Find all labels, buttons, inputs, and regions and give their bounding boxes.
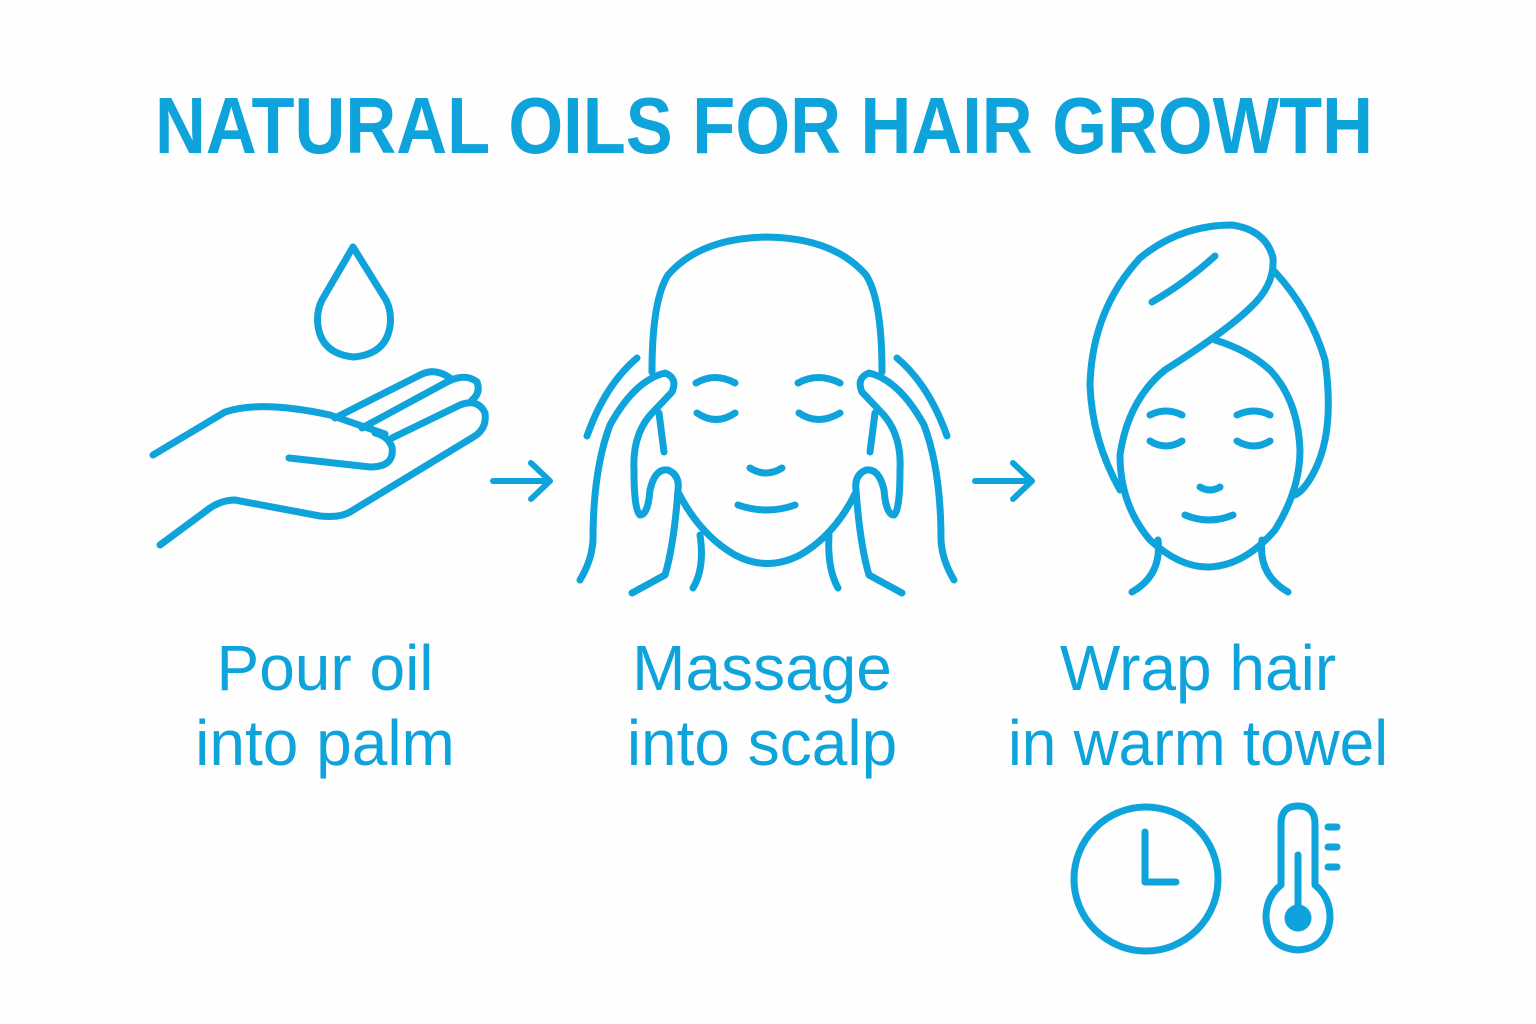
title: NATURAL OILS FOR HAIR GROWTH [155, 81, 1373, 170]
icon: face with towel [1090, 225, 1328, 592]
label: step 3: Wrap hair [1060, 632, 1336, 704]
label: step 2: into scalp [627, 707, 897, 779]
label: step 3: in warm towel [1008, 707, 1388, 779]
label: step 1: into palm [195, 707, 455, 779]
arrow 1 [493, 463, 550, 499]
arrow 2 [975, 463, 1032, 499]
icon: clock [1074, 807, 1218, 951]
label: step 2: Massage [632, 632, 892, 704]
label: step 1: Pour oil [216, 632, 434, 704]
icon: thermometer [1266, 806, 1337, 950]
icon: face massage [580, 237, 954, 593]
icon: oil drop over hand [153, 247, 485, 545]
